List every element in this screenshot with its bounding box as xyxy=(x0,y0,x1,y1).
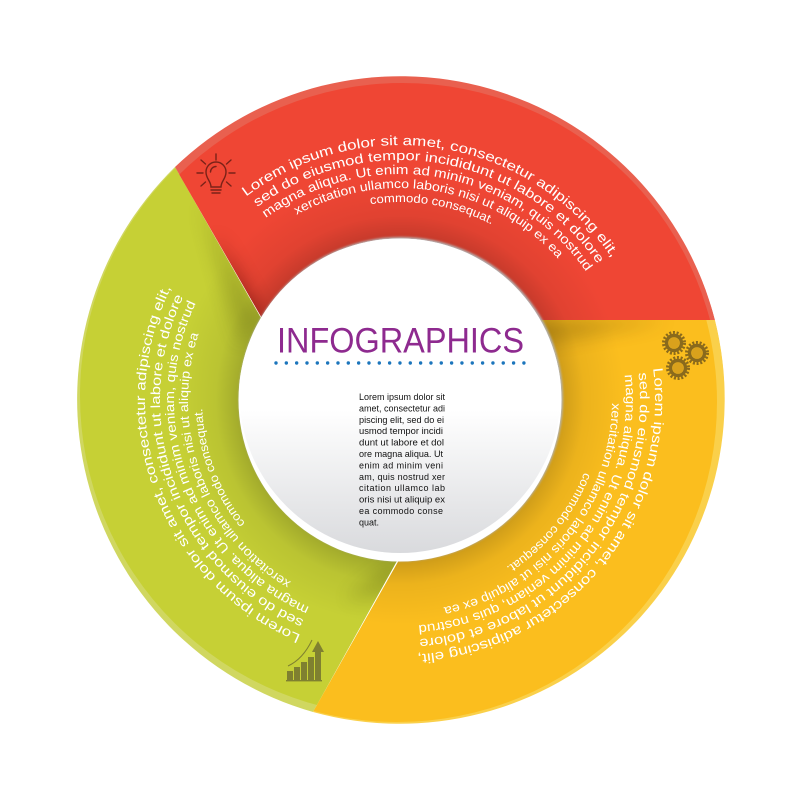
centre body text: Lorem ipsum dolor sit xyxy=(359,392,445,402)
panel: red segment xyxy=(175,76,715,320)
centre body text: citation ullamco lab xyxy=(359,483,445,493)
icon: bar chart with arrow xyxy=(286,640,324,681)
yellow segment text: sed do eiusmod tempor incididunt ut labore et dolore xyxy=(420,373,650,646)
centre body text: am, quis nostrud xer xyxy=(359,472,445,482)
red segment text: magna aliqua. Ut enim ad minim veniam, quis nostrud xyxy=(262,164,594,271)
green segment text: magna aliqua. Ut enim ad minim veniam, quis nostrud xyxy=(164,300,308,613)
red segment text: commodo consequat. xyxy=(370,194,492,224)
icon: gears xyxy=(664,332,708,378)
centre body text: ore magna aliqua. Ut xyxy=(359,449,443,459)
icon: light bulb xyxy=(197,154,235,193)
title: INFOGRAPHICS xyxy=(277,322,524,360)
centre body text xyxy=(359,392,446,527)
centre body text: oris nisi ut aliquip ex xyxy=(359,495,446,505)
yellow segment text: magna aliqua. Ut enim ad minim veniam, quis nostrud xyxy=(419,375,633,635)
panel: yellow segment xyxy=(313,320,725,724)
yellow segment text: xercitation ullamco laboris nisi ut aliquip ex ea xyxy=(444,403,619,614)
green segment text: sed do eiusmod tempor incididunt ut labore et dolore xyxy=(150,296,303,626)
centre body text: amet, consectetur adi xyxy=(359,403,445,413)
centre body text: dunt ut labore et dol xyxy=(359,438,444,448)
centre body text: piscing elit, sed do ei xyxy=(359,415,444,425)
centre body text: usmod tempor incidi xyxy=(359,426,443,436)
centre body text: ea commodo conse xyxy=(359,506,443,516)
panel: centre disk xyxy=(238,231,563,562)
green segment text: xercitation ullamco laboris nisi ut aliquip ex ea xyxy=(178,334,291,588)
centre body text: enim ad minim veni xyxy=(359,460,443,470)
green segment text: Lorem ipsum dolor sit amet, consectetur adipiscing elit, xyxy=(136,288,300,643)
dotted divider xyxy=(276,361,524,365)
panel: green segment xyxy=(77,167,397,712)
red segment text: sed do eiusmod tempor incididunt ut labore et dolore xyxy=(254,152,602,262)
red segment text: xercitation ullamco laboris nisi ut aliquip ex ea xyxy=(294,179,562,258)
red segment text: Lorem ipsum dolor sit amet, consectetur adipiscing elit, xyxy=(242,135,616,258)
centre body text: quat. xyxy=(359,517,379,527)
yellow segment text: commodo consequat. xyxy=(507,474,590,571)
yellow segment text: Lorem ipsum dolor sit amet, consectetur adipiscing elit, xyxy=(418,368,664,664)
green segment text: commodo consequat. xyxy=(194,410,244,526)
